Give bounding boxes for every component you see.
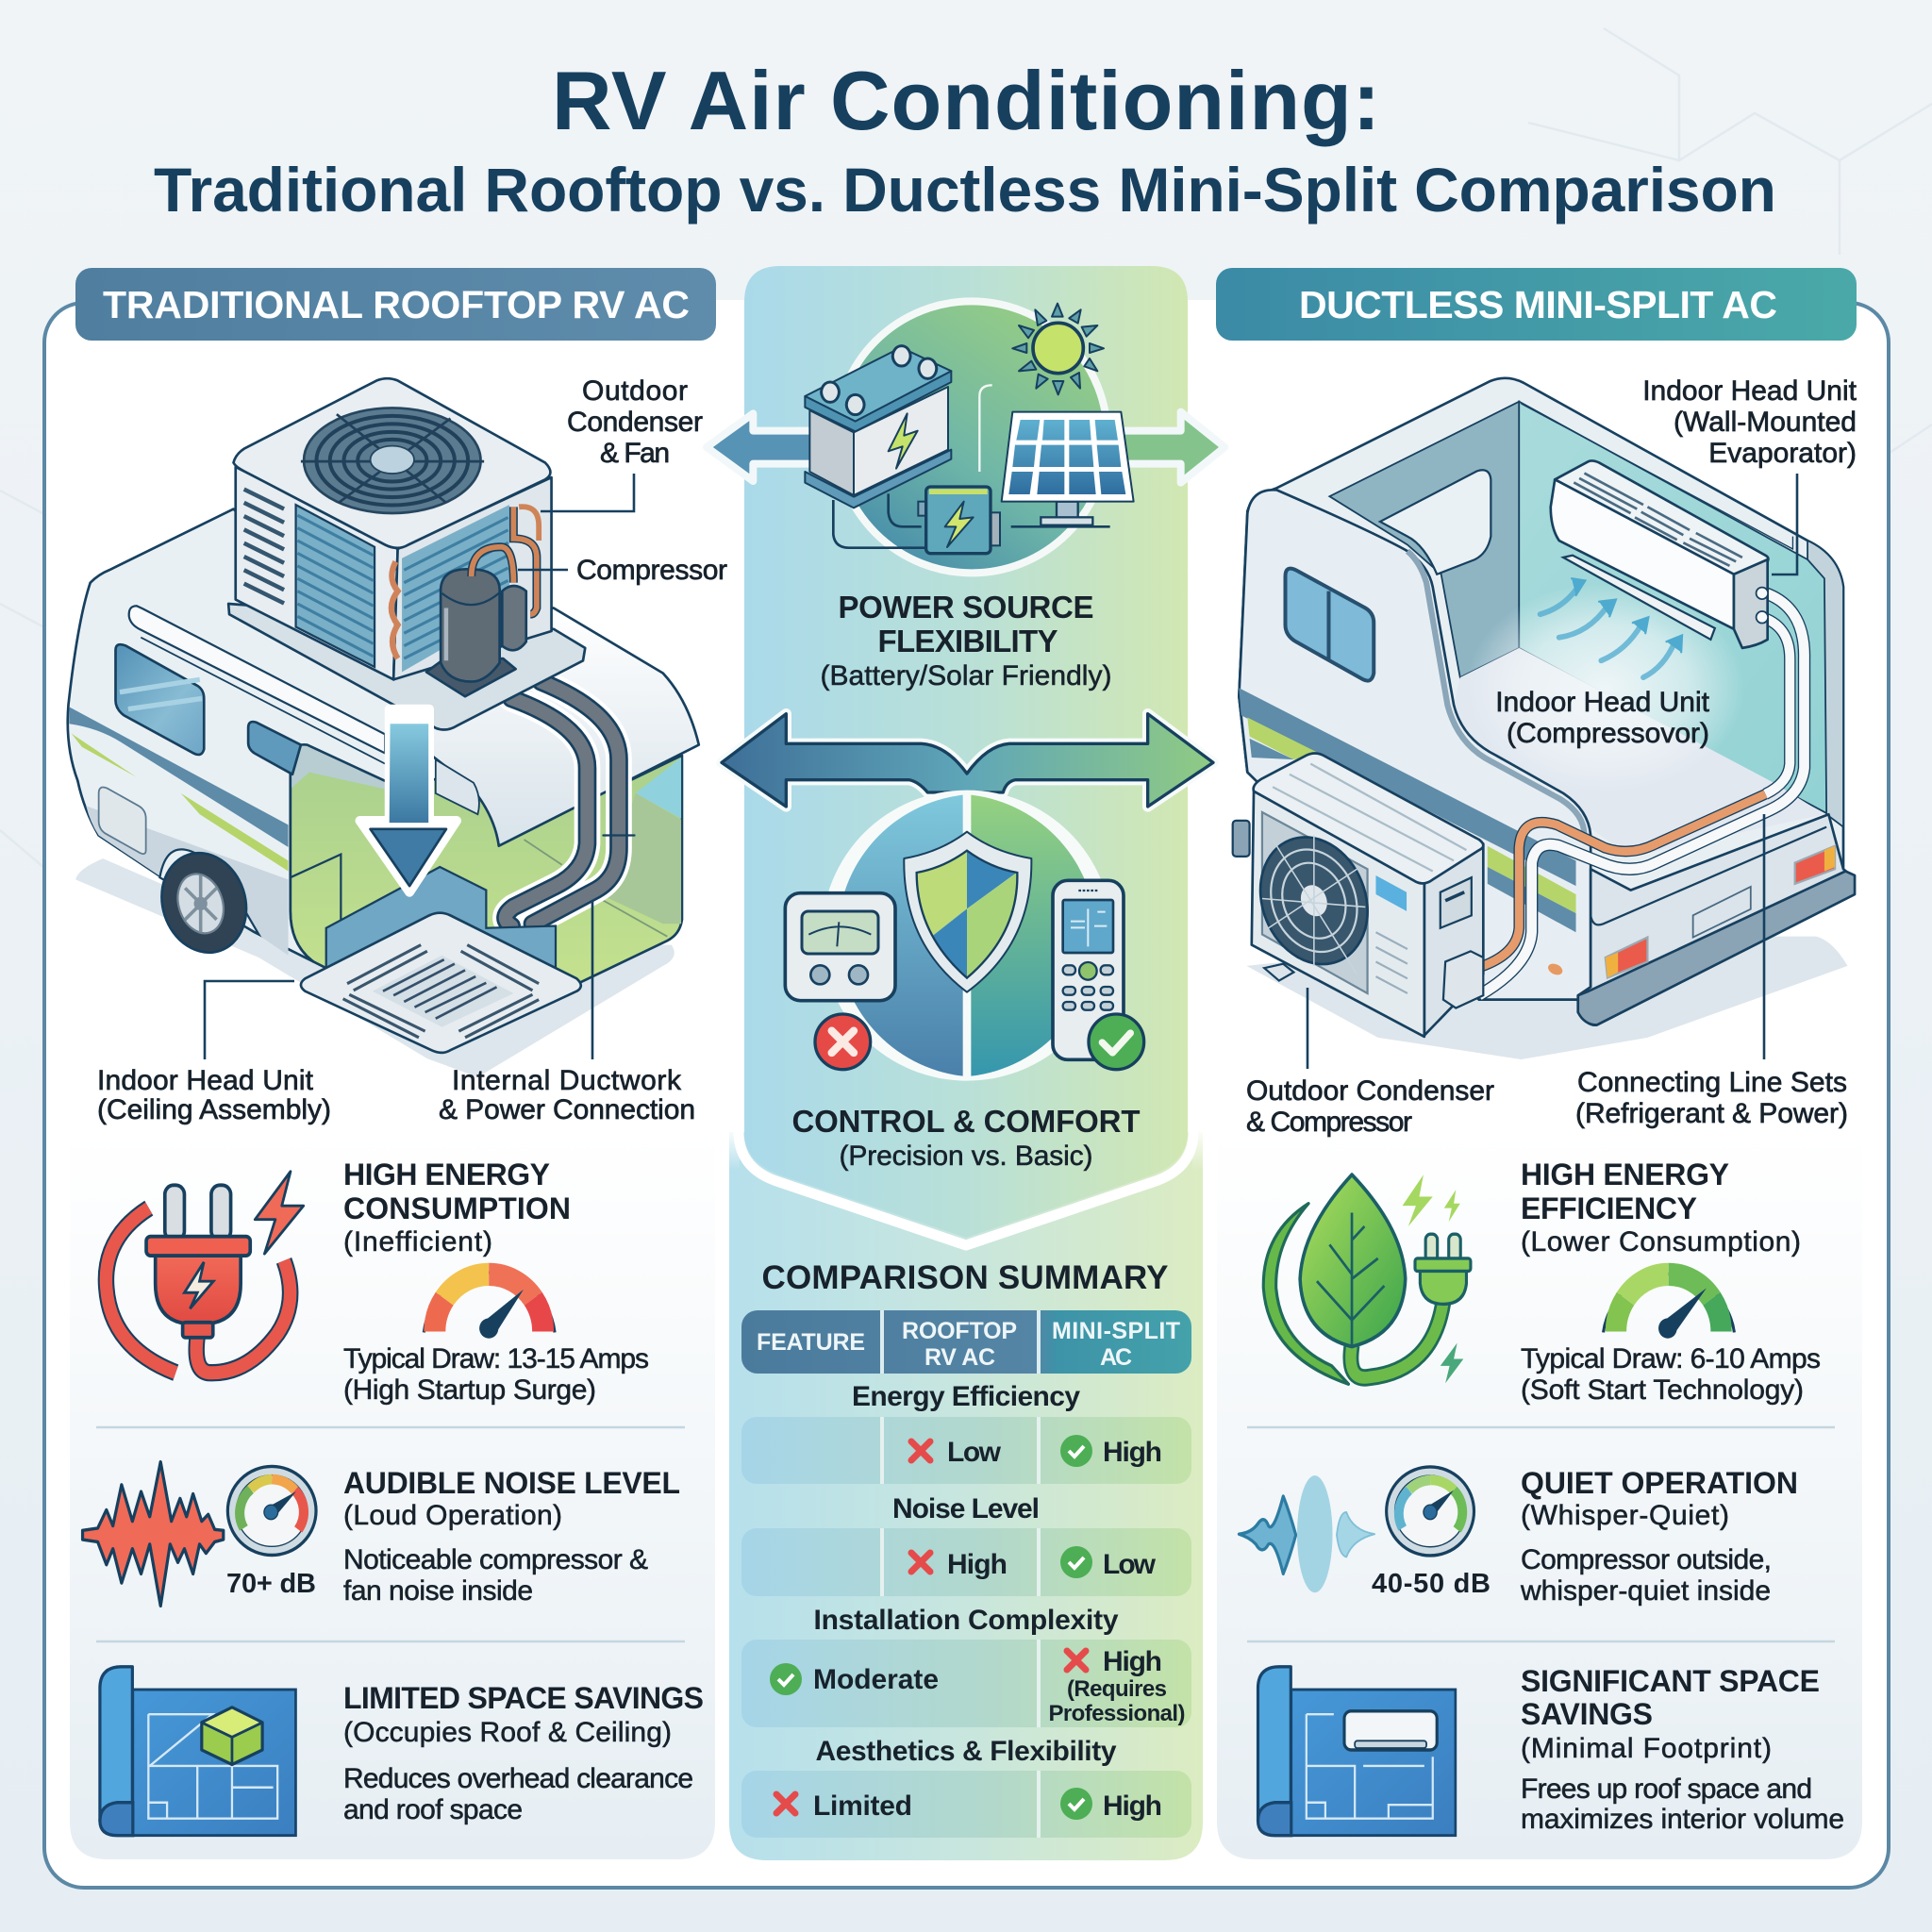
label: outdoor condenser and compressor: Outdoor Condenser <box>1246 1075 1494 1107</box>
text: significant space savings: Frees up roof space and <box>1521 1774 1812 1805</box>
text: significant space savings: maximizes interior volume <box>1521 1804 1844 1835</box>
table title: COMPARISON SUMMARY <box>762 1259 1168 1296</box>
row: energy efficiency: High <box>1103 1437 1162 1468</box>
leader lines: mini-split <box>1307 474 1797 1069</box>
row: energy efficiency: Low <box>947 1437 1002 1468</box>
arrow: split double <box>722 714 1213 807</box>
title: Traditional Rooftop vs. Ductless Mini-Split Comparison <box>154 155 1776 225</box>
diagram: ductless mini-split RV <box>1233 378 1855 1059</box>
icon: blueprint with box <box>100 1667 295 1836</box>
text: high energy consumption: (Inefficient) <box>343 1226 492 1257</box>
text: high energy consumption: (High Startup Surge) <box>343 1374 596 1406</box>
row: noise level: High <box>947 1549 1008 1580</box>
wheel <box>149 841 258 963</box>
label: internal ductwork: & Power Connection <box>439 1094 695 1125</box>
outdoor condenser unit <box>1241 753 1483 1037</box>
text: high energy efficiency <box>1521 1158 1821 1406</box>
icon: loud wave <box>83 1462 224 1606</box>
section: control and comfort <box>722 714 1213 1081</box>
row: noise level <box>741 1493 1191 1596</box>
label: outdoor condenser and fan <box>567 375 703 469</box>
label: indoor head unit wall-mounted: Evaporator) <box>1708 438 1857 469</box>
diagram: traditional rooftop RV <box>68 378 699 1077</box>
row: noise level: Low <box>1103 1549 1157 1580</box>
text: limited space savings: Reduces overhead clearance <box>343 1763 693 1794</box>
ground shadow <box>1246 937 1847 1059</box>
circle split backdrop <box>822 791 1112 1081</box>
row: installation complexity <box>741 1605 1191 1727</box>
text: quiet operation: (Whisper-Quiet) <box>1521 1500 1729 1531</box>
icons: right benefits <box>1239 1174 1734 1836</box>
interior cutaway <box>291 744 682 991</box>
icon: check badge <box>1089 1014 1144 1070</box>
heading: ductless mini-split: DUCTLESS MINI-SPLIT AC <box>1299 283 1777 326</box>
text: quiet operation: whisper-quiet inside <box>1520 1575 1771 1607</box>
central duct <box>326 867 556 974</box>
leader lines: rooftop <box>205 474 634 1059</box>
rear bumper and lights <box>1233 814 1855 1025</box>
row: installation complexity: Installation Complexity <box>813 1605 1119 1636</box>
row: aesthetics and flexibility: Limited <box>813 1790 912 1822</box>
icon: shield <box>904 832 1031 992</box>
main panel <box>44 300 1889 1888</box>
icon: remote <box>1053 880 1124 1059</box>
table header: FEATURE <box>757 1329 865 1356</box>
text: limited space savings: LIMITED SPACE SAVINGS <box>343 1681 704 1715</box>
table header: RV AC <box>924 1344 995 1371</box>
condenser unit <box>234 378 552 679</box>
arrow: cold air down <box>359 709 457 892</box>
row: aesthetics and flexibility <box>741 1736 1191 1838</box>
section: power source flexibility <box>707 301 1224 573</box>
text: high energy efficiency: Typical Draw: 6-10 Amps <box>1521 1343 1821 1374</box>
text: audible noise level: fan noise inside <box>343 1575 533 1607</box>
fan grille <box>301 408 484 513</box>
text: audible noise level <box>226 1466 680 1607</box>
icon: sun <box>1012 304 1104 394</box>
icon: battery <box>805 346 951 508</box>
label: indoor head unit wall-mounted <box>1642 375 1857 469</box>
icon: white divider <box>979 385 992 472</box>
label: indoor head unit ceiling <box>97 1065 331 1125</box>
text: limited space savings <box>343 1681 704 1825</box>
icon: analog thermostat <box>785 893 895 1001</box>
icon: quiet dial <box>1387 1467 1474 1556</box>
text: significant space savings: SIGNIFICANT SPACE <box>1521 1664 1820 1698</box>
label: indoor head unit wall-mounted: Indoor Head Unit <box>1642 375 1857 407</box>
text: high energy efficiency: EFFICIENCY <box>1521 1191 1697 1225</box>
table header: AC <box>1100 1344 1132 1371</box>
label: connecting line sets: (Refrigerant & Power) <box>1575 1098 1848 1129</box>
row: aesthetics and flexibility: High <box>1103 1790 1162 1822</box>
text: high energy efficiency: HIGH ENERGY <box>1521 1158 1729 1191</box>
icons: left benefits <box>83 1172 555 1836</box>
gauge: low draw <box>1604 1274 1734 1339</box>
panel: left benefits background <box>70 1132 715 1859</box>
row: energy efficiency: Energy Efficiency <box>852 1381 1080 1412</box>
text: audible noise level: (Loud Operation) <box>343 1500 562 1531</box>
comparison table <box>741 1259 1191 1838</box>
text: high energy efficiency: (Soft Start Technology) <box>1521 1374 1804 1406</box>
text: high energy consumption: CONSUMPTION <box>343 1191 571 1225</box>
label: indoor head unit ceiling: (Ceiling Assembly) <box>97 1094 331 1125</box>
front roof cap <box>431 608 699 846</box>
text: quiet operation: Compressor outside, <box>1521 1544 1772 1575</box>
wall-mounted head unit <box>1477 460 1805 995</box>
label: indoor head unit ceiling: Indoor Head Unit <box>97 1065 314 1096</box>
air flow arrows <box>1541 578 1682 677</box>
text: significant space savings: (Minimal Footprint) <box>1521 1733 1772 1764</box>
table header: ROOFTOP <box>902 1318 1017 1344</box>
row: noise level: Noise Level <box>892 1493 1040 1524</box>
icon: blueprint with head unit <box>1257 1667 1456 1836</box>
label: indoor head unit compressor <box>1495 687 1710 749</box>
text: power source flexibility <box>821 590 1111 691</box>
title <box>154 54 1776 225</box>
text: high energy consumption: Typical Draw: 13-15 Amps <box>343 1343 649 1374</box>
icon: loud dial <box>227 1466 316 1556</box>
title: RV Air Conditioning: <box>552 54 1380 147</box>
label: outdoor condenser and compressor <box>1246 1075 1494 1138</box>
text: high energy consumption: HIGH ENERGY <box>343 1158 550 1191</box>
row: energy efficiency <box>741 1381 1191 1484</box>
table header <box>741 1310 1191 1374</box>
label: connecting line sets: Connecting Line Sets <box>1577 1067 1847 1098</box>
panel: center column <box>726 266 1206 1860</box>
text: quiet operation: 40-50 dB <box>1372 1569 1491 1599</box>
interior walls and floor <box>1329 402 1843 857</box>
text: significant space savings <box>1521 1664 1844 1835</box>
body shell <box>1239 378 1843 1000</box>
text: audible noise level: AUDIBLE NOISE LEVEL <box>343 1466 680 1500</box>
base plate <box>228 604 585 729</box>
gauge: high draw <box>424 1273 555 1339</box>
text: quiet operation <box>1372 1466 1798 1607</box>
icon: quiet wave <box>1239 1475 1374 1592</box>
cab wall <box>1239 490 1591 1000</box>
circle backdrop <box>836 301 1108 573</box>
text: high energy efficiency: (Lower Consumption) <box>1521 1226 1801 1257</box>
text: control and comfort: CONTROL & COMFORT <box>792 1104 1140 1139</box>
text: audible noise level: 70+ dB <box>226 1569 316 1599</box>
compressor and copper pipes <box>426 507 539 696</box>
hoses <box>506 682 635 926</box>
body side wall <box>68 509 393 961</box>
icon: leaf plug <box>1263 1174 1471 1384</box>
text: high energy consumption <box>343 1158 649 1406</box>
text: power source flexibility: POWER SOURCE <box>838 590 1094 625</box>
label: internal ductwork <box>439 1065 695 1125</box>
text: power source flexibility: FLEXIBILITY <box>877 624 1058 658</box>
row: installation complexity: Moderate <box>813 1664 939 1695</box>
row: installation complexity: Professional) <box>1049 1701 1185 1726</box>
text: limited space savings: (Occupies Roof & Ceiling) <box>343 1717 672 1748</box>
label: indoor head unit compressor: Indoor Head Unit <box>1495 687 1710 718</box>
arrow: left <box>707 413 830 481</box>
label: outdoor condenser and fan: & Fan <box>600 438 670 469</box>
text: significant space savings: SAVINGS <box>1521 1697 1653 1731</box>
label: outdoor condenser and compressor: & Compressor <box>1246 1107 1412 1138</box>
heading: traditional rooftop: TRADITIONAL ROOFTOP RV AC <box>103 283 690 326</box>
heading: traditional rooftop <box>75 268 716 341</box>
text: audible noise level: Noticeable compressor & <box>343 1544 648 1575</box>
label: compressor: Compressor <box>576 555 727 586</box>
row: installation complexity: (Requires <box>1067 1676 1167 1702</box>
heading: ductless mini-split <box>1216 268 1857 341</box>
arrow: right <box>1097 412 1224 483</box>
text: control and comfort <box>792 1104 1140 1172</box>
icon: inverter <box>918 487 1000 554</box>
panel: right benefits background <box>1217 1132 1862 1859</box>
icon: plug <box>106 1172 304 1373</box>
label: indoor head unit compressor: (Compressovor) <box>1507 718 1709 749</box>
ground shadow <box>75 858 675 1077</box>
text: limited space savings: and roof space <box>343 1794 523 1825</box>
row: installation complexity: High <box>1103 1646 1162 1677</box>
icon: x badge <box>815 1014 871 1070</box>
label: indoor head unit wall-mounted: (Wall-Mounted <box>1674 407 1857 438</box>
ceiling grille <box>301 913 581 1053</box>
label: outdoor condenser and fan: Outdoor <box>582 375 688 407</box>
label: connecting line sets <box>1575 1067 1848 1129</box>
row: aesthetics and flexibility: Aesthetics & Flexibility <box>815 1736 1117 1767</box>
table header: MINI-SPLIT <box>1052 1318 1180 1344</box>
label: internal ductwork: Internal Ductwork <box>452 1065 682 1096</box>
icon: wires <box>833 493 1110 548</box>
text: control and comfort: (Precision vs. Basic) <box>840 1141 1092 1172</box>
text: power source flexibility: (Battery/Solar Friendly) <box>821 660 1111 691</box>
label: outdoor condenser and fan: Condenser <box>567 407 703 438</box>
text: quiet operation: QUIET OPERATION <box>1521 1466 1798 1500</box>
icon: solar panel <box>1002 412 1134 525</box>
